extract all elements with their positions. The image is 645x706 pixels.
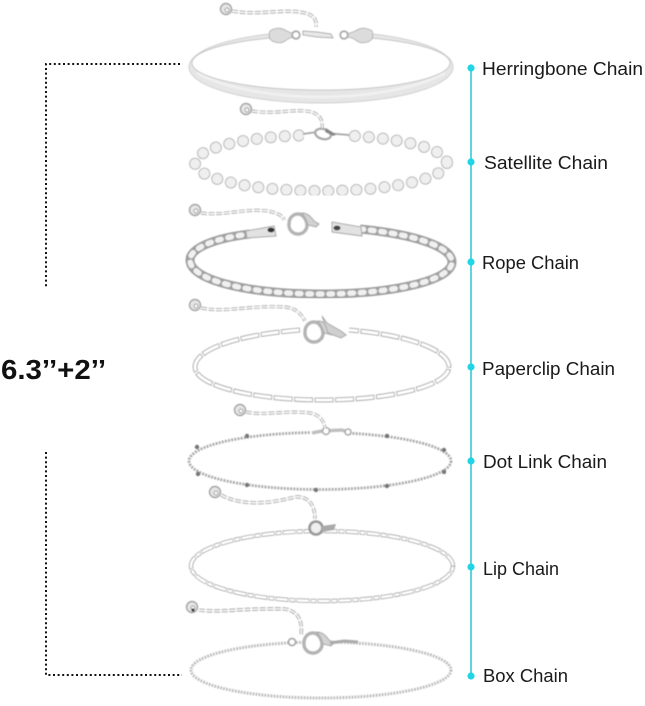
label: lip chain: Lip Chain [483,559,559,579]
bracelet: dot link chain [189,404,451,492]
label: box chain: Box Chain [483,666,568,686]
label: herringbone chain: Herringbone Chain [482,59,643,79]
label: paperclip chain: Paperclip Chain [482,359,615,379]
bracelet: lip chain [191,486,453,601]
bracelet: herringbone chain [189,4,453,103]
label: satellite chain: Satellite Chain [484,153,608,173]
label: rope chain: Rope Chain [482,253,579,273]
dimension bracket: lower dotted line [46,452,182,675]
bracelet: rope chain [190,204,452,294]
dimension bracket: upper dotted line [46,64,180,287]
bracelet: box chain [186,602,451,698]
bracelet: paperclip chain [190,300,449,400]
label: dot link chain: Dot Link Chain [483,452,607,472]
length label: 6.3’’+2’’ [1,354,106,385]
bracelet: satellite chain [195,104,447,191]
timeline: teal vertical line with dots [467,64,475,680]
